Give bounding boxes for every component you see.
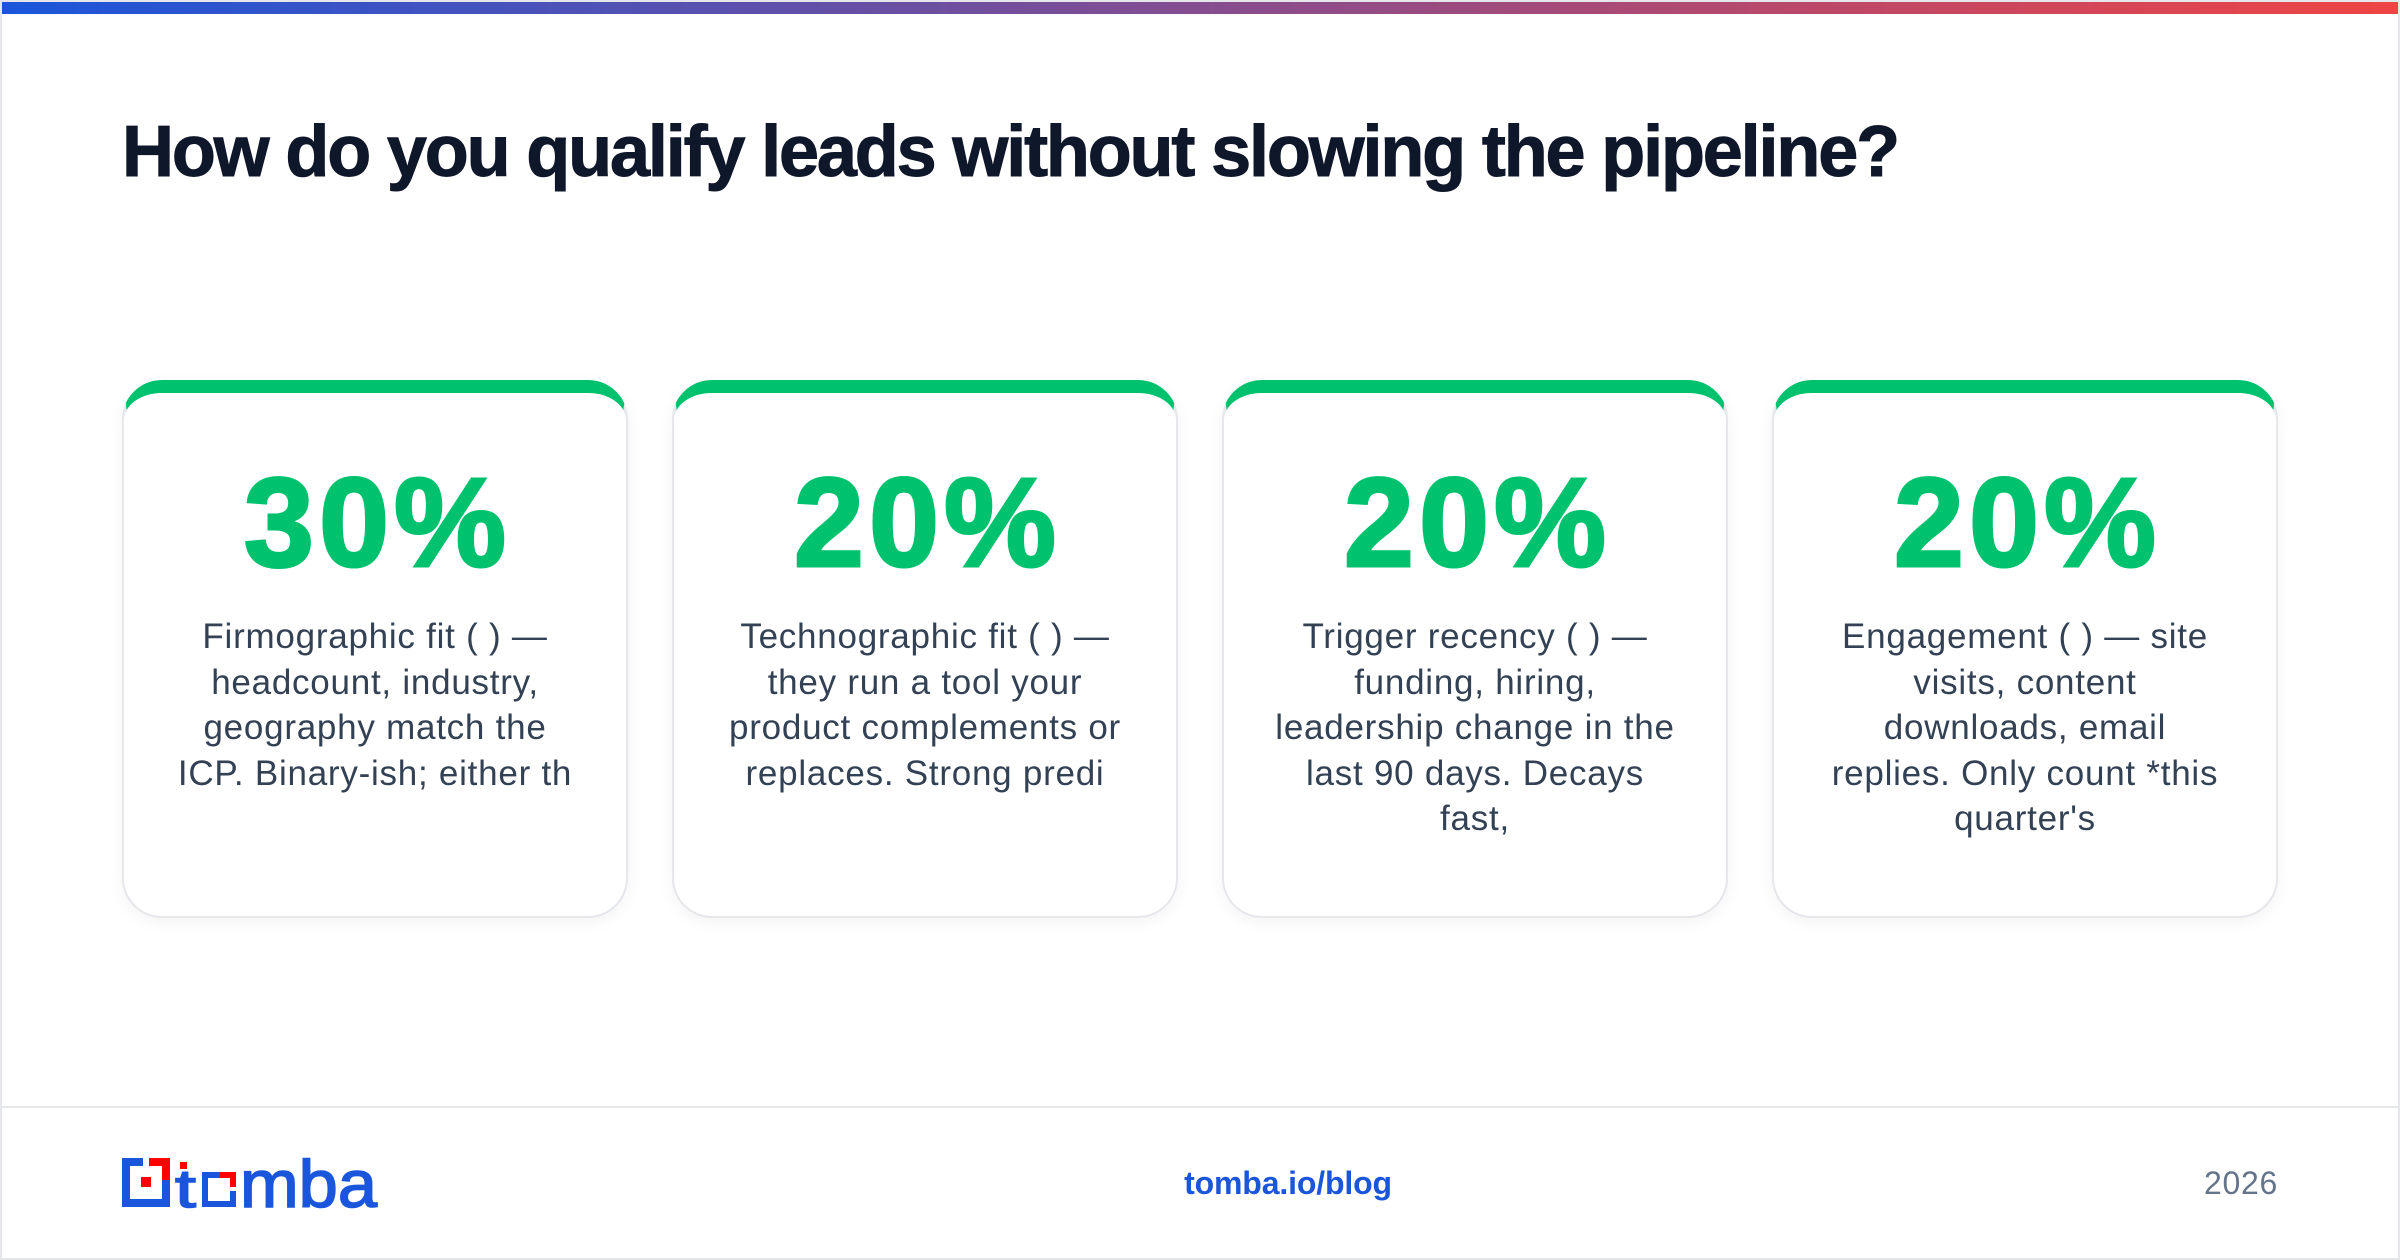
- stat: 20% technographic: 20%: [794, 452, 1061, 593]
- description: trigger recency: leadership change in the: [1275, 708, 1675, 747]
- description: engagement: Engagement ( ) — site: [1842, 617, 2208, 656]
- panel: trigger recency card: [1222, 380, 1728, 918]
- logo letter t: [175, 1159, 196, 1219]
- stat: 20% engagement: 20%: [1894, 452, 2161, 593]
- panel: engagement card: [1772, 380, 2278, 918]
- logo: tomba: [122, 1150, 378, 1216]
- description: firmographic fit: ICP. Binary-ish; either th: [178, 754, 572, 793]
- description: firmographic fit: headcount, industry,: [211, 663, 539, 702]
- description: trigger recency: [1275, 617, 1675, 838]
- description: firmographic fit: [178, 617, 572, 793]
- description: engagement: downloads, email: [1884, 708, 2166, 747]
- description: engagement: visits, content: [1913, 663, 2137, 702]
- footer divider: [2, 1106, 2398, 1108]
- stat: 20% trigger: 20%: [1344, 452, 1611, 593]
- footer year: 2026: [2204, 1165, 2278, 1201]
- description: trigger recency: funding, hiring,: [1354, 663, 1596, 702]
- stat: 30%: 30%: [244, 452, 511, 593]
- description: technographic fit: product complements or: [729, 708, 1121, 747]
- description: firmographic fit: Firmographic fit ( ) —: [202, 617, 548, 656]
- footer link: tomba.io/blog: [1184, 1165, 1392, 1201]
- panel: firmographic fit card: [122, 380, 628, 918]
- description: technographic fit: Technographic fit ( ) —: [740, 617, 1110, 656]
- description: firmographic fit: geography match the: [203, 708, 547, 747]
- description: engagement: [1832, 617, 2218, 838]
- description: trigger recency: fast,: [1440, 799, 1510, 838]
- title: How do you qualify leads without slowing the pipeline?: [122, 112, 1898, 192]
- description: technographic fit: replaces. Strong predi: [746, 754, 1104, 793]
- description: trigger recency: last 90 days. Decays: [1306, 754, 1644, 793]
- panel: technographic fit card: [672, 380, 1178, 918]
- description: trigger recency: Trigger recency ( ) —: [1302, 617, 1648, 656]
- description: technographic fit: [729, 617, 1121, 793]
- logo square mark: [122, 1158, 170, 1207]
- top gradient bar: [2, 2, 2398, 14]
- logo square o: [202, 1172, 236, 1207]
- description: engagement: replies. Only count *this: [1832, 754, 2218, 793]
- description: engagement: quarter's: [1954, 799, 2096, 838]
- description: technographic fit: they run a tool your: [768, 663, 1082, 702]
